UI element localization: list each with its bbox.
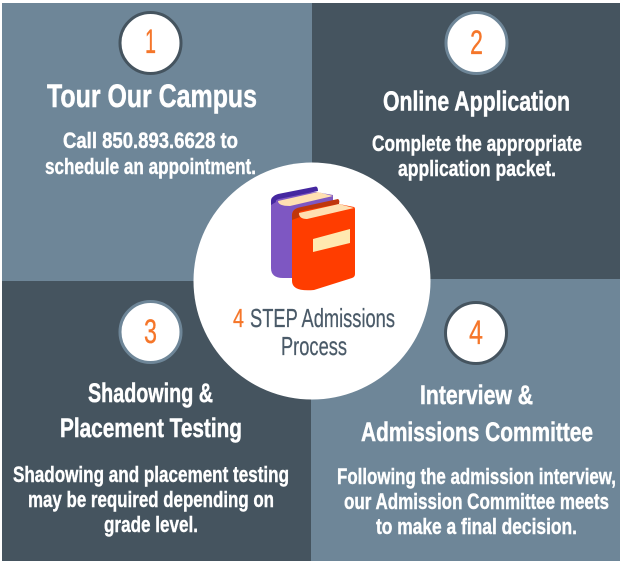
orange book xyxy=(292,199,355,290)
text: step 1 description: Call 850.893.6628 to xyxy=(63,128,238,153)
book label xyxy=(313,229,350,252)
number badge 3: 3 xyxy=(144,313,157,351)
number badge 1: 1 xyxy=(145,23,156,61)
heading: Shadowing and Placement Testing xyxy=(60,378,242,443)
center circle xyxy=(194,162,430,400)
panel: step 3 background xyxy=(2,281,311,561)
center title: 4 xyxy=(233,303,244,333)
heading: Interview and Admissions Committee xyxy=(361,380,593,447)
icon: stacked books xyxy=(271,186,355,290)
number badge 2 xyxy=(446,12,507,74)
step 1: tour our campus xyxy=(45,12,257,179)
number badge 3 xyxy=(120,302,181,362)
number badge 4 xyxy=(446,302,506,364)
panel: step 2 background xyxy=(312,3,620,279)
center title xyxy=(233,303,395,361)
number badge 2: 2 xyxy=(470,24,483,62)
heading: Shadowing and Placement Testing: Shadowing & xyxy=(88,378,213,408)
purple book xyxy=(271,186,333,278)
panel: step 4 background xyxy=(311,279,620,561)
step 4: interview and admissions committee xyxy=(337,302,616,539)
heading: Tour Our Campus: Tour Our Campus xyxy=(47,78,257,114)
text: step 1 description: schedule an appointment. xyxy=(45,154,256,179)
step 3: shadowing and placement testing xyxy=(13,302,289,537)
text: step 1 description xyxy=(45,128,256,179)
step 2: online application xyxy=(372,12,582,181)
center title: Process xyxy=(281,331,347,361)
panel: step 1 background xyxy=(2,3,312,281)
number badge 1 xyxy=(120,12,181,74)
text: step 2 description: application packet. xyxy=(398,156,556,181)
number badge 4: 4 xyxy=(469,314,483,352)
text: step 3 description: may be required depending on xyxy=(28,487,274,512)
heading: Interview and Admissions Committee: Interview & xyxy=(420,380,533,410)
heading: Shadowing and Placement Testing: Placement Testing xyxy=(60,413,242,443)
text: step 2 description xyxy=(372,131,582,181)
text: step 4 description xyxy=(337,464,616,539)
text: step 3 description xyxy=(13,462,289,537)
text: step 3 description: Shadowing and placement testing xyxy=(13,462,289,487)
text: step 3 description: grade level. xyxy=(104,512,198,537)
center title: STEP Admissions xyxy=(250,303,395,333)
